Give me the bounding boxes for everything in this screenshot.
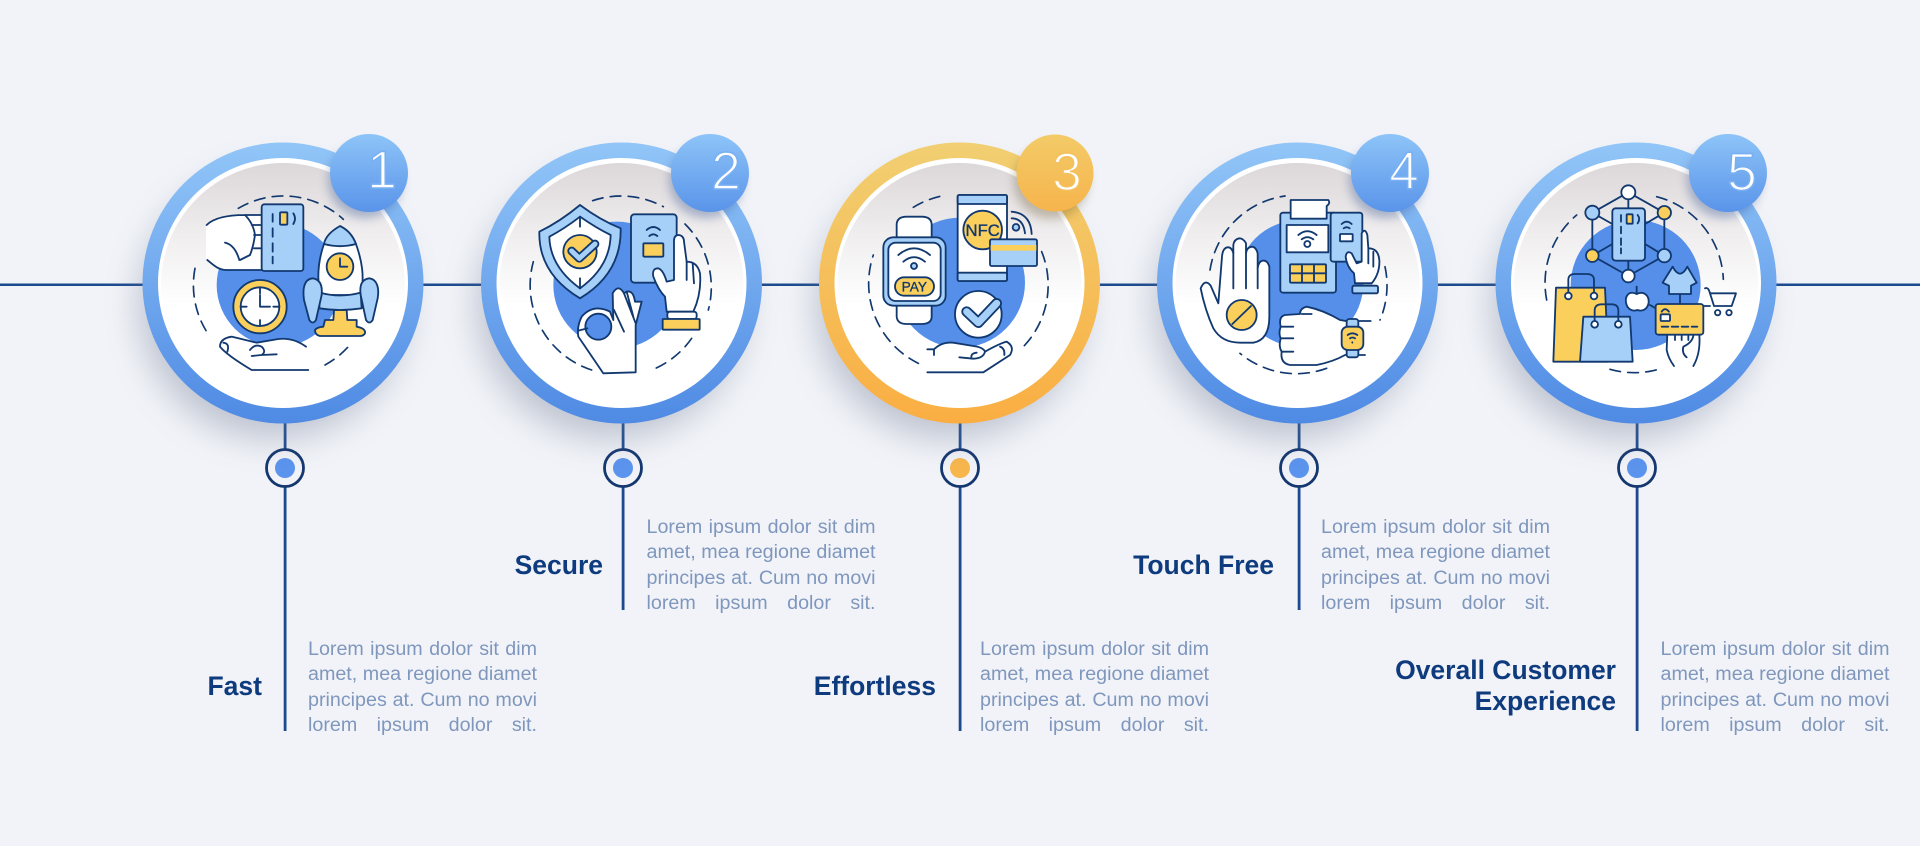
step 4 connector and marker [1280, 420, 1318, 610]
text block: Touch Free description [1321, 516, 1550, 614]
text block: Touch Free description: lorem ipsum dolor sit. [1321, 592, 1550, 614]
badge number 3: 3 [1052, 143, 1082, 202]
step 5 connector and marker [1618, 420, 1656, 731]
text block: Fast description: principes at. Cum no movi [308, 688, 537, 710]
text block: Effortless description [980, 638, 1209, 736]
heading: Overall Customer Experience: Experience [1475, 686, 1616, 716]
text block: Overall Customer Experience description: Lorem ipsum dolor sit dim [1660, 638, 1890, 660]
text block: Overall Customer Experience description: lorem ipsum dolor sit. [1660, 714, 1890, 736]
text block: Effortless description: Lorem ipsum dolor sit dim [980, 638, 1209, 660]
heading: Secure: Secure [515, 550, 603, 580]
heading: Overall Customer Experience: Overall Customer [1395, 655, 1616, 685]
text block: Overall Customer Experience description [1660, 638, 1890, 736]
text block: Fast description [308, 638, 537, 736]
text block: Touch Free description: principes at. Cum no movi [1321, 566, 1550, 588]
text block: Effortless description: lorem ipsum dolor sit. [980, 714, 1209, 736]
text block: Touch Free description: Lorem ipsum dolor sit dim [1321, 516, 1550, 538]
heading: Effortless: Effortless [814, 671, 936, 701]
text block: Fast description: amet, mea regione diamet [308, 663, 537, 685]
icon: secure payment [530, 196, 711, 373]
badge number 4: 4 [1389, 142, 1419, 201]
text block: Secure description: principes at. Cum no movi [646, 566, 876, 588]
panel: step 4 circle [1154, 134, 1438, 439]
text: PAY: PAY [902, 279, 927, 294]
icon: effortless payment [869, 195, 1048, 372]
text block: Fast description: Lorem ipsum dolor sit dim [308, 638, 537, 660]
badge number 2: 2 [711, 142, 741, 201]
icon: touch free payment [1201, 196, 1387, 374]
text block: Secure description: lorem ipsum dolor sit. [646, 592, 876, 614]
panel: step 5 circle [1492, 134, 1776, 439]
panel: step 3 circle [816, 134, 1100, 439]
heading: Overall Customer Experience [1395, 655, 1616, 716]
text: NFC: NFC [966, 221, 1000, 240]
text block: Effortless description: amet, mea regione diamet [980, 663, 1209, 685]
icon: fast payment [193, 196, 378, 370]
heading: Fast: Fast [208, 671, 262, 701]
text block: Secure description: Lorem ipsum dolor sit dim [646, 516, 876, 538]
horizontal timeline line [0, 284, 1920, 286]
panel: step 2 circle [477, 134, 762, 439]
text block: Overall Customer Experience description: amet, mea regione diamet [1660, 663, 1890, 685]
step 1 connector and marker [266, 420, 304, 731]
text block: Effortless description: principes at. Cum no movi [980, 688, 1209, 710]
text block: Overall Customer Experience description: principes at. Cum no movi [1660, 688, 1890, 710]
badge number 5: 5 [1727, 143, 1757, 202]
badge number 1: 1 [367, 141, 397, 200]
text block: Secure description [646, 516, 876, 614]
icon: overall customer experience [1545, 185, 1736, 373]
step 3 connector and marker [942, 420, 978, 731]
text block: Fast description: lorem ipsum dolor sit. [308, 714, 537, 736]
text block: Secure description: amet, mea regione diamet [646, 541, 876, 563]
text block: Touch Free description: amet, mea regione diamet [1321, 541, 1550, 563]
step 2 connector and marker [604, 420, 642, 610]
heading: Touch Free: Touch Free [1133, 550, 1274, 580]
panel: step 1 circle [139, 134, 424, 439]
